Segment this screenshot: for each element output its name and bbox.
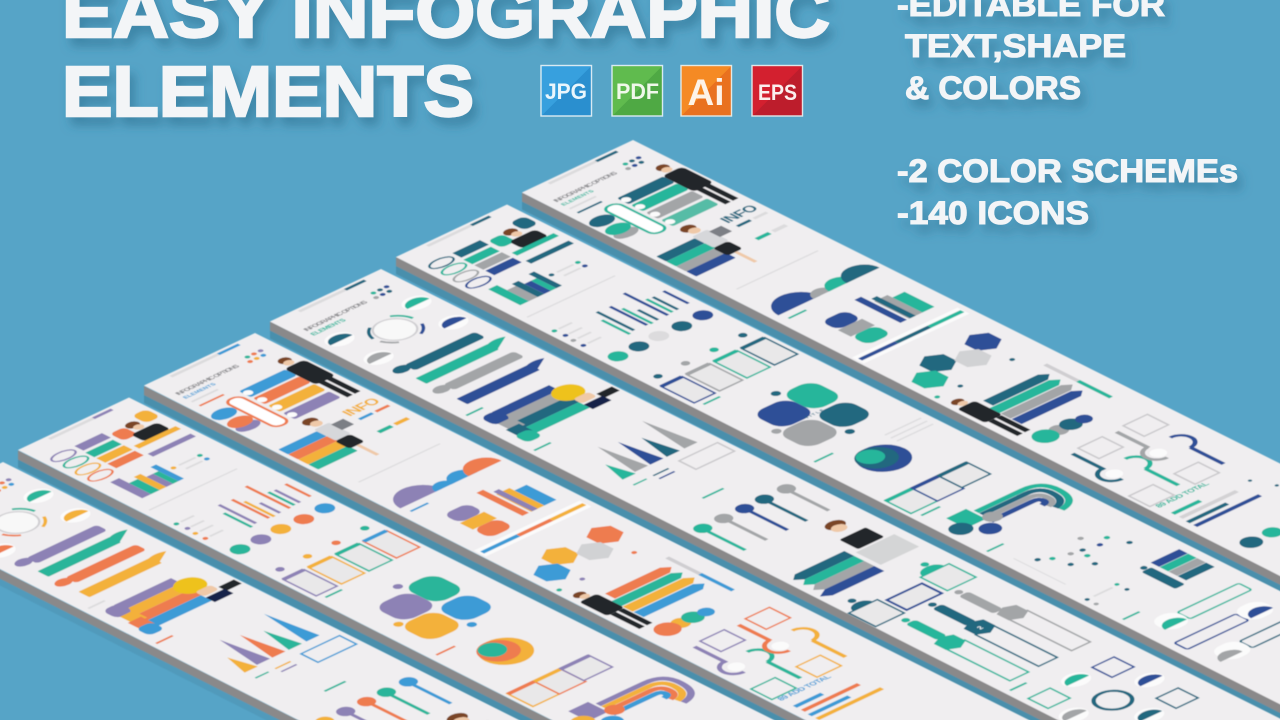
header line [548, 151, 619, 184]
colour dots [0, 478, 19, 493]
sheet 5: colourful charts page [12, 398, 1129, 720]
page title: ELEMENTS [309, 318, 349, 337]
orange label [155, 635, 174, 644]
page title: INFOGRAPHIC OPTIONS [174, 364, 242, 396]
tree connector [676, 607, 865, 700]
total caption and bars [775, 667, 884, 720]
label [87, 600, 106, 609]
petal diagram [352, 570, 508, 646]
feature list: TEXT,SHAPE [905, 28, 1126, 64]
line chart [206, 475, 315, 528]
man with arrow bars [568, 556, 721, 630]
total caption and bars: 89 ADD TOTAL [775, 674, 834, 702]
box row with dots [267, 522, 420, 596]
lollipop chart [311, 675, 459, 720]
ring diagram with domes [318, 293, 476, 368]
bust and speech bubbles [102, 409, 179, 446]
petal diagram: TITLE [804, 409, 825, 419]
icon: JPG [541, 66, 592, 116]
orange label [435, 646, 456, 655]
page title: ELEMENTS [182, 383, 218, 400]
feature list: -140 ICONS [897, 195, 1089, 231]
rounded note outline [224, 395, 290, 428]
woman at desk with arrow bars [748, 512, 927, 599]
teal label [533, 442, 552, 451]
silhouettes with numbered hexagons [890, 583, 1091, 681]
hexagons [887, 329, 1032, 399]
page title [552, 171, 641, 213]
column chart [854, 284, 934, 323]
scatter dots [1013, 521, 1144, 585]
icon: PDF [612, 66, 662, 116]
hexagons [509, 522, 654, 592]
blue label [410, 503, 429, 512]
domes [759, 258, 880, 315]
swirl ribbons with gears [556, 670, 702, 720]
total caption and bars [1153, 465, 1280, 527]
header line [48, 409, 114, 440]
icon: Ai [681, 66, 732, 116]
circle row [602, 308, 718, 363]
small legend [255, 661, 297, 681]
legend dots [172, 515, 225, 540]
teal label [920, 506, 941, 516]
box row with dots [645, 329, 798, 403]
stacked ellipses [584, 212, 643, 241]
ring outlines [46, 448, 118, 483]
divider [148, 468, 238, 511]
teal label [813, 453, 834, 462]
feature list: & COLORS [905, 70, 1081, 106]
sheet 3: teal and blue ribbons page [264, 269, 1280, 720]
bust and speech bubbles [480, 216, 557, 253]
sheet 4: colourful infographic page [138, 333, 1255, 720]
small legend [169, 453, 211, 473]
tree connector [1054, 414, 1243, 507]
bubble circles [648, 604, 721, 639]
petal diagram [730, 377, 886, 453]
four short bars [451, 240, 523, 275]
layered donut [844, 439, 924, 478]
sheet 1: teal and blue infographic page [514, 140, 1280, 720]
icon: JPG: JPG [545, 79, 587, 104]
colour strip [852, 308, 970, 364]
silhouette with stacked bars [1136, 549, 1218, 589]
layered donut [466, 632, 546, 671]
swirl ribbons with gears [934, 477, 1080, 548]
trophy with bars [479, 371, 629, 443]
small legend [633, 468, 675, 488]
connected outline boxes [833, 557, 978, 627]
divider [736, 250, 819, 290]
teal label [702, 396, 721, 405]
progress line [665, 557, 735, 591]
stacked ellipses [206, 405, 265, 434]
progress line [1043, 364, 1113, 398]
woman with laptop and bars [638, 217, 775, 283]
spike chart [194, 611, 322, 673]
ribbon bars [389, 326, 556, 407]
teal label [465, 407, 484, 416]
lower circles [1234, 504, 1280, 550]
trophy with bars [101, 564, 251, 636]
legend dots [550, 322, 603, 347]
title [62, 0, 830, 132]
total caption and bars: 89 ADD TOTAL [1153, 481, 1212, 509]
icon: Ai: Ai [688, 72, 724, 113]
lollipop chart [689, 482, 837, 553]
gray note lines [884, 418, 934, 442]
small legend [547, 260, 589, 280]
colour dots [618, 156, 649, 171]
person with four bars [603, 160, 742, 228]
page title: INFOGRAPHIC OPTIONS [552, 171, 620, 203]
column chart [476, 477, 556, 516]
header line [426, 216, 492, 247]
domes [381, 451, 502, 508]
page title [174, 364, 263, 406]
second box row [884, 462, 992, 514]
teal label [788, 310, 807, 319]
column chart [488, 270, 562, 305]
outline box [679, 443, 734, 469]
page title: ELEMENTS [560, 190, 596, 207]
long bars [511, 233, 574, 264]
small legend [1082, 583, 1159, 620]
colour dots [240, 349, 271, 364]
teal label [324, 589, 343, 598]
teal label [1009, 682, 1028, 691]
icon: EPS [752, 66, 802, 116]
second box row [506, 655, 614, 706]
ribbon bars [11, 519, 179, 600]
divider [358, 443, 441, 483]
colour strip [474, 501, 592, 557]
pill stack [821, 310, 892, 345]
ring diagram with domes [0, 486, 98, 561]
teal label [702, 488, 724, 499]
person with four bars [225, 353, 364, 421]
feature list: -2 COLOR SCHEMEs [897, 153, 1238, 189]
man with arrow bars [946, 363, 1099, 438]
four short bars [73, 433, 145, 468]
spike chart [572, 418, 700, 480]
long bars [133, 426, 196, 457]
divider [526, 275, 616, 318]
header line [170, 344, 241, 377]
icon: PDF: PDF [616, 79, 659, 104]
icon: EPS: EPS [758, 80, 797, 105]
INFO heading: INFO [338, 396, 385, 418]
outline box [301, 636, 356, 662]
page title [0, 493, 1, 530]
colour dots [366, 285, 397, 300]
woman at desk [438, 709, 506, 720]
page title: INFOGRAPHIC OPTIONS [302, 300, 370, 332]
INFO heading [337, 396, 414, 433]
cross diagram with boxes [1018, 652, 1207, 720]
header line [298, 280, 367, 312]
woman with laptop and bars [260, 410, 397, 476]
pill stack [443, 503, 514, 538]
dome callout rows [1139, 580, 1280, 666]
title: ELEMENTS [62, 53, 474, 132]
circle row [224, 501, 340, 556]
sheet 6: colourful ribbons page [0, 462, 1003, 720]
teal label [324, 681, 346, 692]
rounded note outline [602, 202, 668, 235]
feature list [897, 0, 1238, 231]
INFO heading: INFO [716, 203, 763, 225]
column chart [110, 462, 184, 498]
line chart [584, 282, 693, 335]
teal label [986, 543, 1004, 552]
ring outlines [424, 255, 496, 290]
bubble circles [1026, 411, 1099, 446]
silhouettes with numbered hexagons: 2 [976, 626, 986, 630]
INFO heading [715, 203, 792, 240]
sheet 2: teal and blue charts page [389, 204, 1280, 720]
